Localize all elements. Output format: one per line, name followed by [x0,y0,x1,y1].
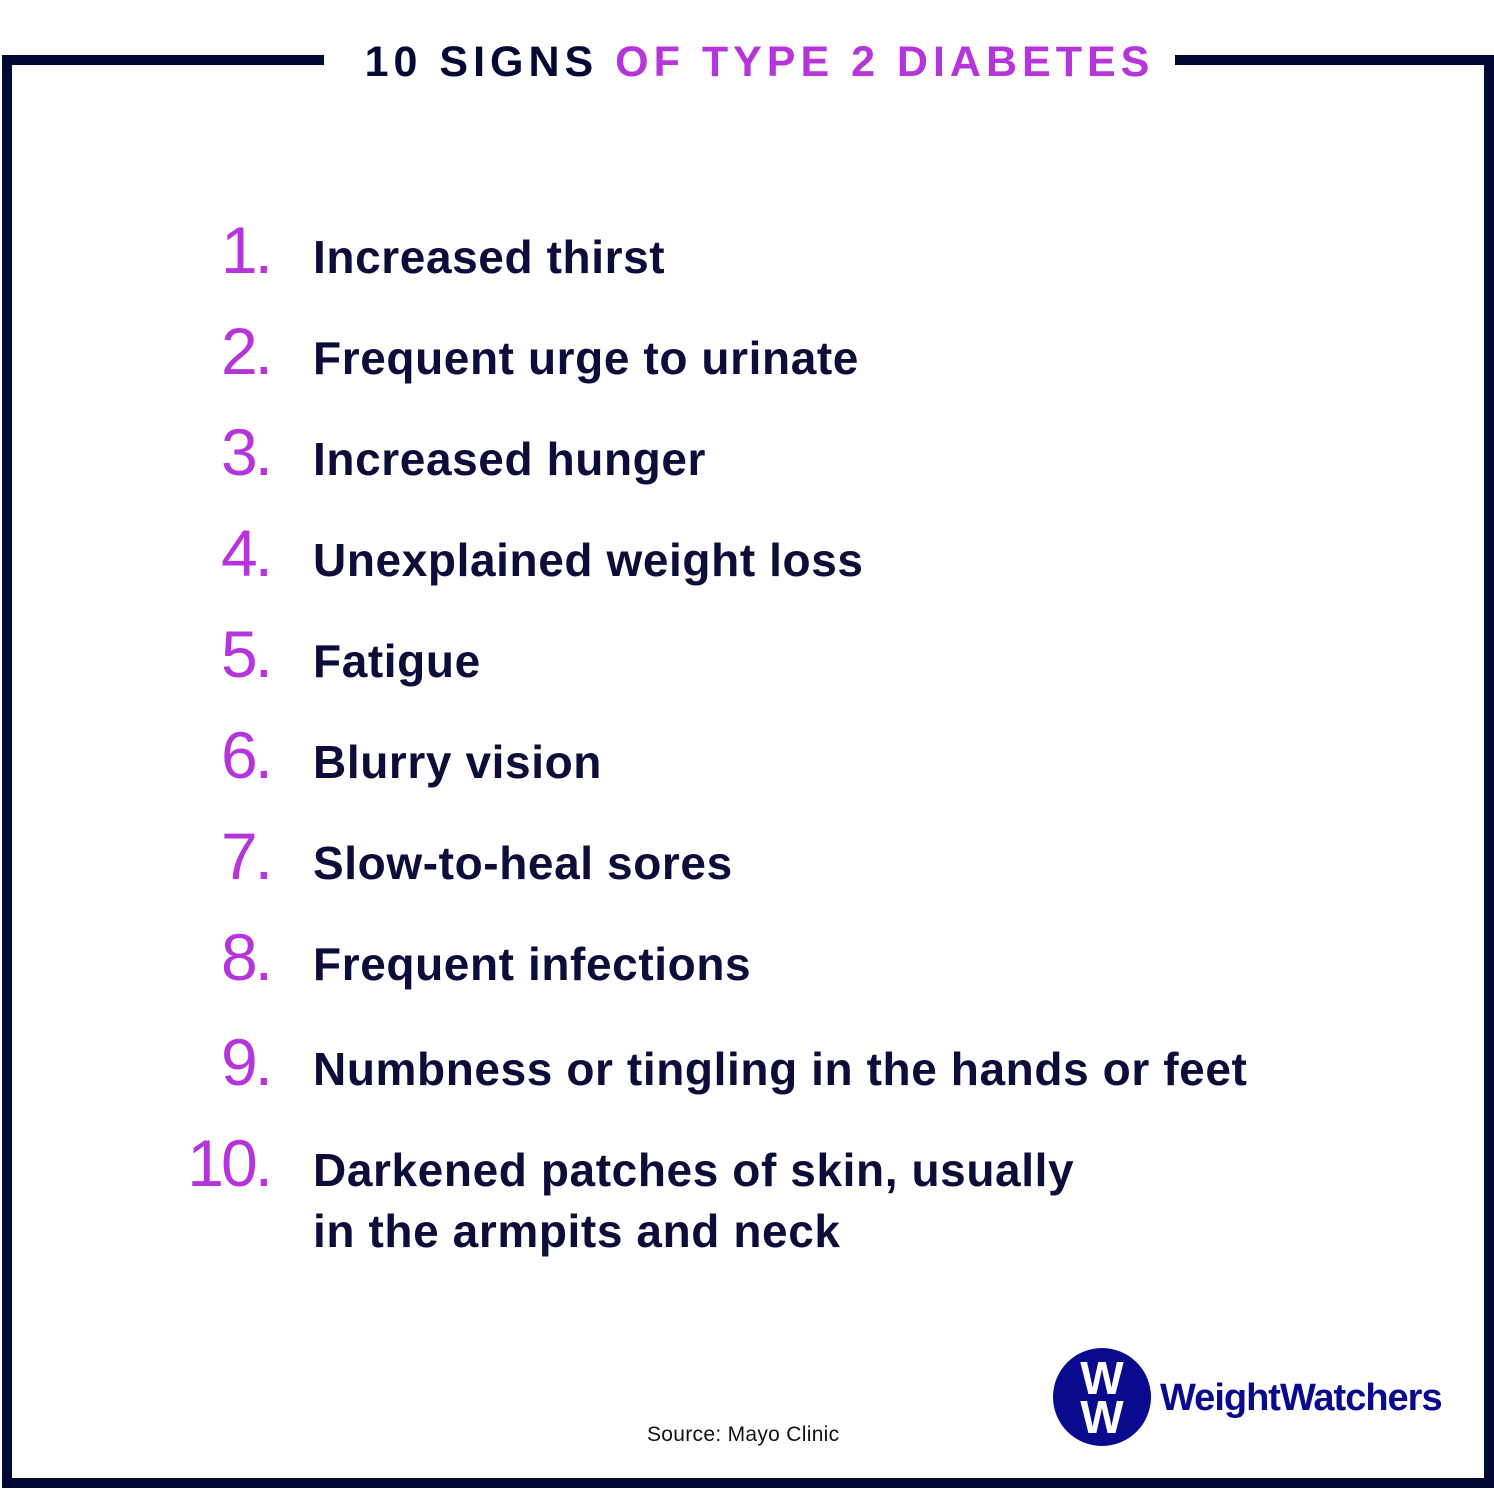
item 10: Darkened patches of skin, usually [313,1144,1074,1196]
item 4: Unexplained weight loss [313,534,864,586]
item 10: in the armpits and neck [313,1205,841,1257]
list of signs [187,213,1247,1257]
item 9: Numbness or tingling in the hands or feet [313,1043,1247,1095]
item 5: Fatigue [313,635,481,687]
item 4 [221,516,864,590]
item 9 [221,1025,1247,1099]
item 1 [221,213,665,287]
item 8: 8. [221,920,270,994]
title: 10 SIGNS OF TYPE 2 DIABETES [365,38,1154,86]
icon: WW circle: W [1080,1352,1124,1404]
item 8: Frequent infections [313,938,751,990]
item 6 [221,718,602,792]
item 7: 7. [221,819,270,893]
item 5 [221,617,481,691]
item 2 [221,314,859,388]
item 1: Increased thirst [313,231,665,283]
item 5: 5. [221,617,270,691]
item 3: 3. [221,415,270,489]
icon: WW circle: W [1080,1391,1124,1443]
logo: WeightWatchers [1053,1348,1442,1446]
item 2: Frequent urge to urinate [313,332,859,384]
item 1: 1. [221,213,270,287]
item 2: 2. [221,314,270,388]
item 3: Increased hunger [313,433,706,485]
item 6: Blurry vision [313,736,602,788]
item 7: Slow-to-heal sores [313,837,733,889]
item 9: 9. [221,1025,270,1099]
item 7 [221,819,733,893]
item 8 [221,920,751,994]
item 6: 6. [221,718,270,792]
item 4: 4. [221,516,270,590]
item 10 [187,1126,1074,1257]
logo wordmark: WeightWatchers [1160,1377,1442,1419]
item 3 [221,415,706,489]
source note: Source: Mayo Clinic [647,1423,839,1446]
icon: WW circle [1053,1348,1151,1446]
item 10: 10. [187,1126,270,1200]
